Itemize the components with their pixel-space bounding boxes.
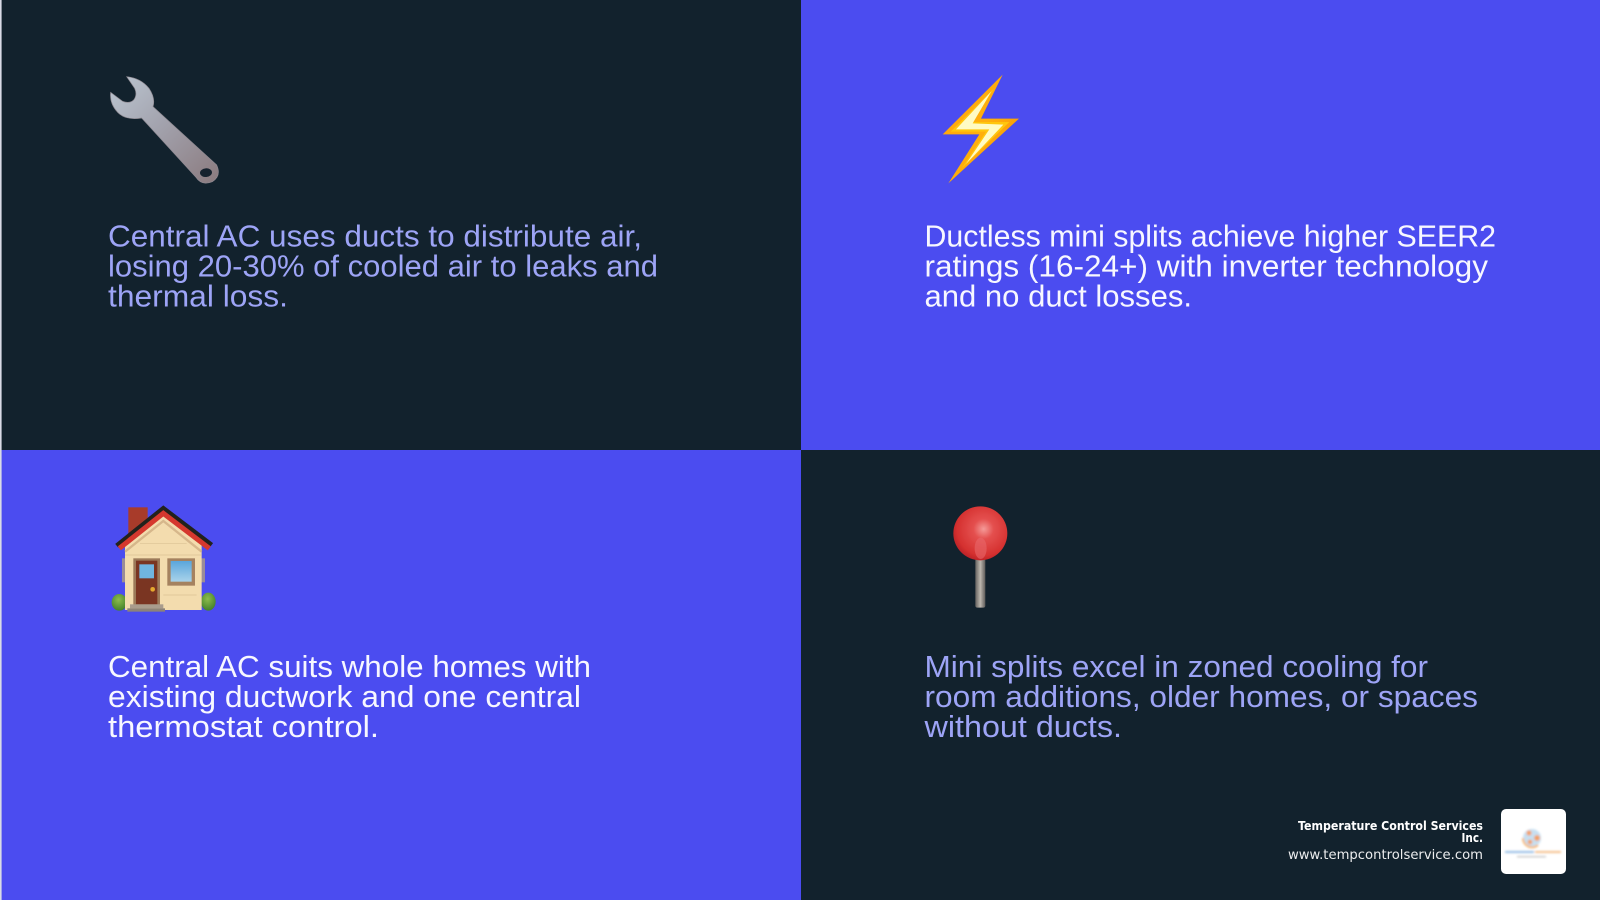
website: www.tempcontrolservice.com xyxy=(1288,847,1483,863)
text: central AC ducts: Central AC uses ducts to distribute air, xyxy=(108,218,642,254)
panel: mini split zoned cooling xyxy=(801,450,1600,900)
text: central AC ducts: thermal loss. xyxy=(108,278,288,314)
text: mini split zoned cooling: room additions, older homes, or spaces xyxy=(924,679,1478,714)
text: mini split zoned cooling: Mini splits excel in zoned cooling for xyxy=(924,649,1428,684)
icon: wrench xyxy=(110,77,218,183)
panel: central AC whole homes xyxy=(0,450,801,900)
panel: central AC ducts xyxy=(0,0,801,450)
icon: lightning bolt xyxy=(943,75,1019,183)
brand footer xyxy=(1288,809,1566,874)
company name: Temperature Control Services xyxy=(1298,819,1483,833)
text: mini split zoned cooling: without ducts. xyxy=(923,709,1122,744)
icon: round pushpin xyxy=(953,506,1007,608)
panel: mini split efficiency xyxy=(801,0,1600,450)
logo card xyxy=(1501,809,1566,874)
icon: house xyxy=(112,507,216,612)
text: mini split efficiency: ratings (16-24+) with inverter technology xyxy=(924,248,1488,284)
text: central AC ducts: losing 20-30% of cooled air to leaks and xyxy=(108,248,658,284)
company name: Inc. xyxy=(1462,831,1483,845)
text: central AC whole homes: existing ductwork and one central xyxy=(108,679,581,714)
left edge strip xyxy=(0,0,2,900)
text: mini split efficiency: and no duct losses. xyxy=(924,278,1192,314)
text: mini split efficiency: Ductless mini splits achieve higher SEER2 xyxy=(924,218,1496,254)
text: central AC whole homes: Central AC suits whole homes with xyxy=(108,649,591,684)
text: central AC whole homes: thermostat control. xyxy=(108,709,379,744)
